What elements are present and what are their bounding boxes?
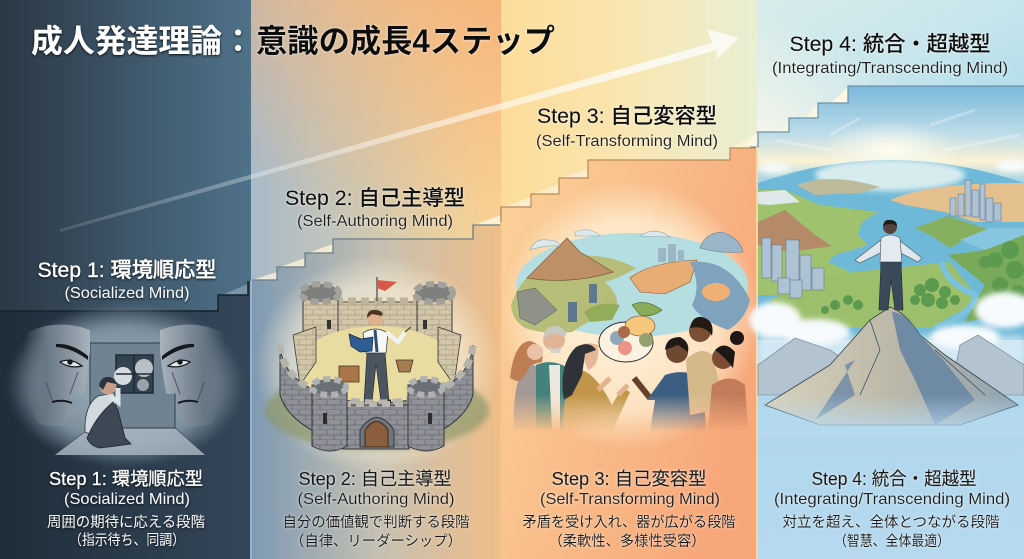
speech bubbles bbox=[599, 316, 655, 362]
step 2 heading bbox=[285, 187, 465, 230]
step 1 description: （指示待ち、同調） bbox=[69, 532, 185, 549]
illustration: castle with a person reading bbox=[265, 277, 489, 451]
step 2 description: (Self-Authoring Mind) bbox=[298, 491, 454, 508]
world landscape bbox=[758, 159, 1024, 340]
title bbox=[31, 23, 555, 59]
city buildings bbox=[762, 180, 1001, 298]
figure: seated person bbox=[85, 377, 131, 448]
step 1 description: 周囲の期待に応える段階 bbox=[47, 514, 205, 531]
step 4 description bbox=[774, 469, 1010, 550]
step 4 description: Step 4: 統合・超越型 bbox=[812, 469, 976, 489]
step 4 heading: Step 4: 統合・超越型 bbox=[790, 33, 990, 56]
step 3 description: Step 3: 自己変容型 bbox=[552, 469, 706, 489]
illustration: person on a mountain overlooking the world bbox=[749, 159, 1024, 437]
step 3 description bbox=[522, 469, 736, 550]
panel divider strips bbox=[250, 147, 758, 559]
step 4 heading: (Integrating/Transcending Mind) bbox=[772, 60, 1008, 77]
step 3 heading bbox=[536, 105, 718, 150]
clouds bbox=[749, 160, 1024, 365]
step 2 heading: Step 2: 自己主導型 bbox=[285, 187, 465, 210]
step 4 description: 対立を超え、全体とつながる段階 bbox=[782, 514, 1000, 531]
figure: person with open arms from behind bbox=[855, 220, 922, 310]
step 1 description: (Socialized Mind) bbox=[64, 491, 190, 508]
step 4 heading bbox=[772, 33, 1008, 77]
main peak bbox=[765, 307, 1018, 425]
step 1 heading bbox=[38, 259, 217, 302]
panel: step 2 background bbox=[252, 208, 501, 559]
step 4 description: （智慧、全体最適） bbox=[834, 533, 950, 550]
illustration: person in a room watched by large faces bbox=[7, 303, 243, 467]
panel: step 1 background bbox=[0, 281, 250, 559]
step 1 heading: Step 1: 環境順応型 bbox=[38, 259, 217, 282]
panel: step 3 background bbox=[500, 132, 760, 559]
step 2 description: Step 2: 自己主導型 bbox=[298, 469, 452, 489]
step 2 description bbox=[282, 469, 470, 550]
illustration: diverse people talking before a varied landscape map bbox=[510, 230, 750, 432]
step 3 description: （柔軟性、多様性受容） bbox=[548, 532, 706, 550]
title: 意識の成長4ステップ bbox=[256, 23, 555, 59]
step 1 description: Step 1: 環境順応型 bbox=[49, 469, 203, 489]
map landscape bbox=[511, 230, 750, 337]
step 4 description: (Integrating/Transcending Mind) bbox=[774, 491, 1010, 508]
step 3 heading: (Self-Transforming Mind) bbox=[536, 133, 718, 150]
step 3 heading: Step 3: 自己変容型 bbox=[537, 105, 717, 128]
forests bbox=[821, 241, 1024, 314]
rising arrow bbox=[60, 29, 739, 232]
panel: step 4 background bbox=[750, 86, 1024, 559]
step 1 description bbox=[47, 469, 205, 549]
group of people bbox=[510, 317, 748, 432]
icon: flag bbox=[377, 277, 397, 301]
step 3 description: (Self-Transforming Mind) bbox=[540, 491, 720, 508]
step 1 heading: (Socialized Mind) bbox=[64, 285, 190, 302]
step 2 description: （自律、リーダーシップ） bbox=[290, 533, 462, 550]
step 3 description: 矛盾を受け入れ、器が広がる段階 bbox=[522, 514, 736, 531]
step 2 description: 自分の価値観で判断する段階 bbox=[282, 514, 470, 531]
figure: teacher with book bbox=[349, 310, 411, 405]
step 2 heading: (Self-Authoring Mind) bbox=[297, 213, 453, 230]
distant mountains bbox=[758, 335, 1024, 395]
title: 成人発達理論： bbox=[31, 23, 254, 59]
